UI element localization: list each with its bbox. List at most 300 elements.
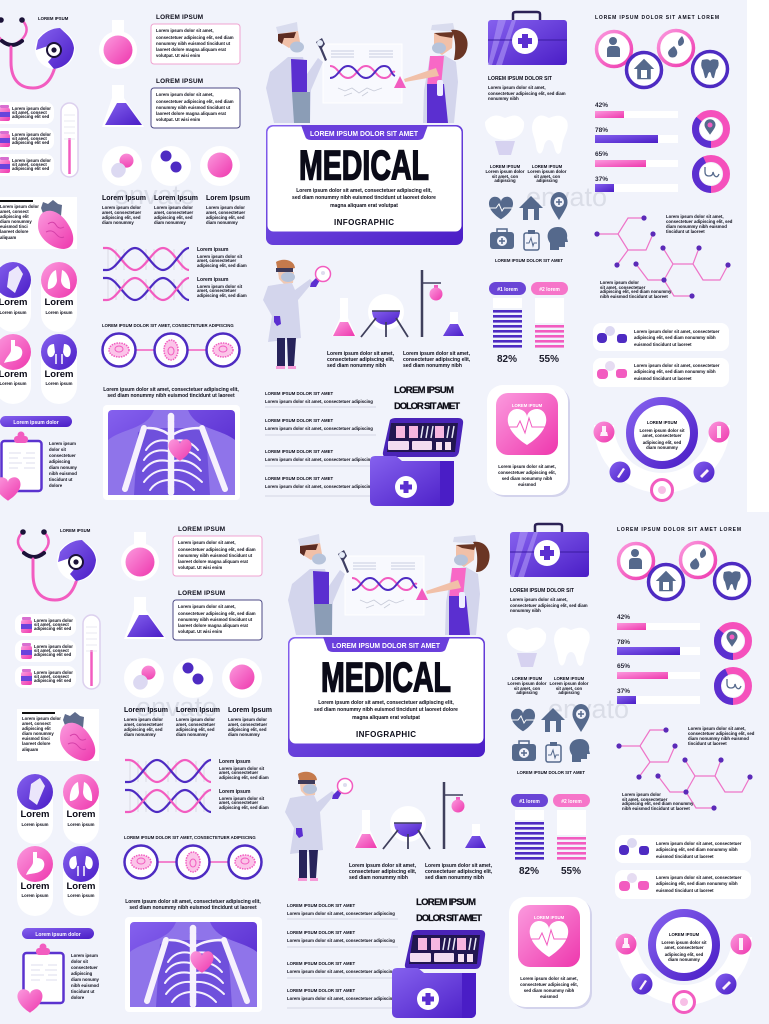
thermometer: [61, 103, 78, 177]
stacked level bars: 55%: [539, 354, 559, 365]
teeth: sit amet, con: [492, 174, 519, 179]
capsule notes: Lorem ipsum dolor sit amet, consectetuer: [634, 363, 720, 368]
vitamin list: Lorem ipsum dolor: [34, 670, 73, 675]
list with first aid kit: Lorem ipsum dolor sit amet, consectetuer adipiscing: [265, 457, 373, 462]
stethoscope and globe: [0, 16, 75, 88]
teeth: LOREM IPSUM: [490, 164, 521, 169]
molecule network: tincidunt ut laoreet: [666, 229, 705, 234]
clipboard note: nibh euismod: [71, 983, 99, 988]
pills trio: adipiscing elit, sed: [228, 727, 267, 732]
molecule network: adipiscing elit, sed diam nonummy: [622, 801, 694, 806]
dna strands: amet, consectetuer: [219, 800, 258, 805]
list with first aid kit: Lorem ipsum dolor sit amet, consectetuer adipiscing: [265, 426, 373, 431]
hub diagram: amet, consectetuer: [664, 945, 704, 950]
list with first aid kit: Lorem ipsum dolor sit amet, consectetuer adipiscing: [287, 969, 395, 974]
heart rate card: LOREM IPSUM: [512, 403, 543, 408]
vitamin list: Lorem ipsum dolor: [12, 106, 51, 111]
teeth: Lorem ipsum dolor: [528, 169, 567, 174]
organ pills: Lorem: [20, 881, 50, 892]
flask note pink: laoreet dolore magna aliquam erat: [178, 559, 249, 564]
vitamin list: sit amet, consect: [34, 674, 69, 679]
list with first aid kit: LOREM IPSUM: [416, 897, 476, 908]
heart rate card: consectetuer adipiscing elit,: [498, 470, 556, 475]
xray: sed diam nonummy nibh euismod tincidunt ut laoreet: [107, 393, 235, 399]
title card: MEDICAL: [321, 654, 451, 700]
title card: Lorem ipsum dolor sit amet, consectetuer adipiscing elit,: [296, 188, 432, 194]
top copy of the infographic: [0, 12, 733, 506]
molecule network: Lorem ipsum dolor sit amet,: [688, 726, 746, 731]
stethoscope and globe: [18, 528, 97, 600]
capsule notes: euismod tincidunt ut laoreet: [634, 376, 692, 381]
list with first aid kit: Lorem ipsum dolor sit amet, consectetuer adipiscing: [265, 484, 373, 489]
icon grid: [489, 192, 568, 263]
dna strands: adipiscing elit, sed diam: [219, 805, 269, 810]
vitamin list: adipiscing elit sed: [12, 114, 50, 119]
title card: LOREM IPSUM DOLOR SIT AMET: [332, 641, 440, 650]
watermark: [115, 186, 606, 206]
pills trio: Lorem ipsum dolor: [154, 205, 193, 210]
linked icon rings: [617, 527, 750, 600]
clipboard note: diam nonumy: [71, 977, 100, 982]
flask note purple: volutpat. Ut wisi enim: [178, 629, 222, 634]
dna strands: [125, 759, 269, 812]
icon grid: LOREM IPSUM DOLOR SIT AMET: [495, 258, 563, 263]
stacked level bars: [489, 282, 568, 365]
list with first aid kit: Lorem ipsum dolor sit amet, consectetuer adipiscing: [265, 399, 373, 404]
scientist and lab equipment: [285, 772, 493, 881]
hub diagram: adipiscing elit, sed: [665, 952, 704, 957]
heart panel: amet, consect: [22, 721, 51, 726]
pills trio: Lorem ipsum dolor: [124, 717, 163, 722]
capsule notes: Lorem ipsum dolor sit amet, consectetuer: [656, 841, 742, 846]
flask note purple: consectetuer adipiscing elit, sed diam: [156, 99, 234, 104]
scientist and lab equipment: sed diam nonummy nibh: [327, 363, 386, 369]
clipboard note: Lorem ipsum: [71, 953, 98, 958]
vitamin list: adipiscing elit sed: [12, 140, 50, 145]
stacked level bars: #2 lorem: [561, 799, 582, 805]
clipboard note: dolor sit: [49, 447, 67, 452]
scientist and lab equipment: consectetuer adipiscing elit,: [403, 357, 471, 363]
heart rate card: euismod: [540, 994, 558, 999]
stacked level bars: 55%: [561, 866, 581, 877]
capsule notes: Lorem ipsum dolor sit amet, consectetuer: [634, 329, 720, 334]
progress bars: 42%: [595, 102, 608, 109]
hub diagram: [594, 401, 730, 500]
heart panel: adipiscing elit: [22, 726, 51, 731]
vitamin list: adipiscing elit sed: [34, 678, 72, 683]
vitamin list: Lorem ipsum dolor: [12, 132, 51, 137]
xray: [103, 387, 240, 500]
dna strands: amet, consectetuer: [219, 770, 258, 775]
pills trio: Lorem Ipsum: [228, 707, 272, 714]
teeth: sit amet, con: [534, 174, 561, 179]
heart panel: amet, consect: [0, 209, 29, 214]
pills trio: adipiscing elit, sed: [124, 727, 163, 732]
teeth: LOREM IPSUM: [532, 164, 563, 169]
xray: sed diam nonummy nibh euismod tincidunt ut laoreet: [129, 905, 257, 911]
flask note pink: volutpat. Ut wisi enim: [178, 565, 222, 570]
clipboard note: dolore: [49, 483, 63, 488]
pills trio: diam nonummy: [154, 220, 186, 225]
hub diagram: Lorem ipsum dolor sit: [639, 428, 685, 433]
title card: LOREM IPSUM DOLOR SIT AMET: [310, 129, 418, 138]
watermark: [136, 692, 629, 724]
stethoscope and globe: LOREM IPSUM: [38, 16, 69, 21]
bacteria row: LOREM IPSUM DOLOR SIT AMET, CONSECTETUER ADIPISCING: [124, 835, 256, 840]
pills trio: Lorem ipsum dolor: [206, 205, 245, 210]
bottom copy of the infographic: [15, 524, 755, 1018]
title card: INFOGRAPHIC: [356, 730, 416, 739]
pills trio: Lorem Ipsum: [154, 195, 198, 202]
pills trio: Lorem Ipsum: [102, 195, 146, 202]
dna strands: adipiscing elit, sed diam: [197, 263, 247, 268]
heart rate card: [509, 897, 592, 1009]
title card: sed diam nonummy nibh euismod tincidunt ut laoreet dolore: [292, 195, 436, 201]
medical case: LOREM IPSUM DOLOR SIT: [488, 76, 552, 82]
list with first aid kit: LOREM IPSUM DOLOR SIT AMET: [265, 449, 333, 454]
watermark: envato: [548, 694, 629, 724]
pills trio: Lorem Ipsum: [176, 707, 220, 714]
scientist and lab equipment: [263, 260, 471, 369]
capsule notes: adipiscing elit, sed diam nonummy nibh: [634, 369, 716, 374]
medical case: nonummy nibh: [510, 608, 541, 613]
vitamin list: adipiscing elit sed: [34, 626, 72, 631]
hub diagram: LOREM IPSUM: [669, 932, 700, 937]
thermometer: [83, 615, 100, 689]
molecule network: diam nonummy nibh euismod: [688, 736, 749, 741]
stethoscope and globe: LOREM IPSUM: [60, 528, 91, 533]
vitamin list: Lorem ipsum dolor: [34, 618, 73, 623]
list with first aid kit: Lorem ipsum dolor sit amet, consectetuer adipiscing: [287, 911, 395, 916]
heart panel: aliquam: [22, 747, 38, 752]
flask note purple: nonummy nibh euismod tincidunt ut: [178, 617, 253, 622]
watermark: envato: [114, 180, 195, 210]
progress bars: 78%: [595, 127, 608, 134]
molecule network: Lorem ipsum dolor: [622, 792, 661, 797]
hub diagram: diam nonummy: [646, 445, 678, 450]
title card: MEDICAL: [299, 142, 429, 188]
xray: Lorem ipsum dolor sit amet, consectetuer adipiscing elit,: [125, 899, 261, 905]
molecule network: adipiscing elit, sed diam nonummy: [600, 289, 672, 294]
flask note pink: LOREM IPSUM: [178, 526, 225, 533]
pills trio: diam nonummy: [124, 732, 156, 737]
scientist and lab equipment: consectetuer adipiscing elit,: [327, 357, 395, 363]
heart panel: Lorem ipsum dolor: [0, 204, 39, 209]
pills trio: Lorem ipsum dolor: [228, 717, 267, 722]
xray: Lorem ipsum dolor sit amet, consectetuer adipiscing elit,: [103, 387, 239, 393]
xray: [125, 899, 262, 1012]
list with first aid kit: Lorem ipsum dolor sit amet, consectetuer adipiscing: [287, 938, 395, 943]
flask note purple: consectetuer adipiscing elit, sed diam: [178, 611, 256, 616]
pills trio: amet, consectetuer: [102, 210, 141, 215]
flask note pink: laoreet dolore magna aliquam erat: [156, 47, 227, 52]
capsule notes: Lorem ipsum dolor sit amet, consectetuer: [656, 875, 742, 880]
capsule notes: adipiscing elit, sed diam nonummy nibh: [634, 335, 716, 340]
heart panel: Lorem ipsum dolor: [22, 716, 61, 721]
pills trio: amet, consectetuer: [206, 210, 245, 215]
bacteria row: LOREM IPSUM DOLOR SIT AMET, CONSECTETUER ADIPISCING: [102, 323, 234, 328]
molecule network: nibh euismod tincidunt ut laoreet: [600, 294, 668, 299]
heart panel: aliquam: [0, 235, 16, 240]
teeth: adipiscing: [494, 178, 516, 183]
organ pills: Lorem ipsum: [22, 893, 49, 898]
bacteria row: [102, 323, 240, 366]
heart panel: laoreet dolore: [22, 741, 51, 746]
heart rate card: sed diam nonummy nibh: [524, 988, 575, 993]
stacked level bars: #1 lorem: [497, 287, 518, 293]
flask note pink: nonummy nibh euismod tincidunt ut: [178, 553, 253, 558]
list with first aid kit: LOREM IPSUM DOLOR SIT AMET: [265, 418, 333, 423]
organ pills: Lorem ipsum: [0, 381, 27, 386]
flask note purple: Lorem ipsum dolor sit amet,: [156, 92, 214, 97]
heart rate card: Lorem ipsum dolor sit amet,: [498, 464, 556, 469]
title card: Lorem ipsum dolor sit amet, consectetuer adipiscing elit,: [318, 700, 454, 706]
medical case: nonummy nibh: [488, 96, 519, 101]
organ pills: Lorem ipsum: [68, 822, 95, 827]
medical case: consectetuer adipiscing elit, sed diam: [488, 91, 566, 96]
pills trio: diam nonummy: [176, 732, 208, 737]
organ pills: Lorem ipsum: [68, 893, 95, 898]
stacked level bars: 82%: [497, 354, 517, 365]
scientist and lab equipment: sed diam nonummy nibh: [403, 363, 462, 369]
heart panel: [0, 197, 77, 249]
teeth: Lorem ipsum dolor: [486, 169, 525, 174]
list with first aid kit: [287, 897, 485, 1018]
clipboard note: tincidunt ut: [71, 989, 95, 994]
hub diagram: diam nonummy: [668, 957, 700, 962]
title card: magna aliquam erat volutpat: [330, 203, 398, 209]
watermark: envato: [136, 692, 217, 722]
flask note purple: [124, 590, 262, 640]
organ pills: Lorem: [44, 297, 74, 308]
donut charts: [718, 626, 748, 702]
flask note pink: [121, 526, 262, 581]
clipboard note: Lorem ipsum dolor: [13, 420, 59, 426]
molecule network: [594, 214, 733, 299]
pills trio: Lorem Ipsum: [124, 707, 168, 714]
stacked level bars: 82%: [519, 866, 539, 877]
heart panel: adipiscing elit: [0, 214, 29, 219]
organ pills: [0, 262, 77, 404]
dna strands: adipiscing elit, sed diam: [219, 775, 269, 780]
capsule notes: adipiscing elit, sed diam nonummy nibh: [656, 881, 738, 886]
progress bars: 37%: [617, 688, 630, 695]
dna strands: Lorem ipsum dolor sit: [197, 284, 243, 289]
vitamin list: sit amet, consect: [34, 648, 69, 653]
flask note pink: Lorem ipsum dolor sit amet,: [156, 28, 214, 33]
molecule network: sit amet, consectetuer: [622, 797, 668, 802]
scientist and lab equipment: sed diam nonummy nibh: [349, 875, 408, 881]
flask note pink: Lorem ipsum dolor sit amet,: [178, 540, 236, 545]
clipboard note: tincidunt ut: [49, 477, 73, 482]
vitamin list: [0, 102, 54, 176]
teeth: [485, 116, 568, 183]
vitamin list: adipiscing elit sed: [34, 652, 72, 657]
hub diagram: Lorem ipsum dolor sit: [661, 940, 707, 945]
flask note pink: consectetuer adipiscing elit, sed diam: [156, 35, 234, 40]
capsule notes: euismod tincidunt ut laoreet: [656, 854, 714, 859]
heart rate card: sed diam nonummy nibh: [502, 476, 553, 481]
heart panel: diam nonummy: [22, 731, 54, 736]
heart panel: euismod tinci: [0, 224, 28, 229]
flask note purple: volutpat. Ut wisi enim: [156, 117, 200, 122]
dna strands: Lorem ipsum: [219, 789, 251, 795]
progress bars: [595, 102, 678, 192]
flask note pink: LOREM IPSUM: [156, 14, 203, 21]
flask note purple: nonummy nibh euismod tincidunt ut: [156, 105, 231, 110]
organ pills: [17, 774, 99, 916]
scientist and lab equipment: Lorem ipsum dolor sit amet,: [403, 351, 471, 357]
list with first aid kit: DOLOR SIT AMET: [416, 913, 482, 924]
scientist and lab equipment: consectetuer adipiscing elit,: [425, 869, 493, 875]
molecule network: consectetuer adipiscing elit, sed: [688, 731, 755, 736]
teeth: Lorem ipsum dolor: [508, 681, 547, 686]
bottom copy background: [0, 512, 769, 1024]
pills trio: adipiscing elit, sed: [206, 215, 245, 220]
title card: magna aliquam erat volutpat: [352, 715, 420, 721]
pills trio: adipiscing elit, sed: [102, 215, 141, 220]
list with first aid kit: LOREM IPSUM DOLOR SIT AMET: [287, 930, 355, 935]
hub diagram: LOREM IPSUM: [647, 420, 678, 425]
clipboard note: [0, 416, 78, 501]
molecule network: tincidunt ut laoreet: [688, 741, 727, 746]
list with first aid kit: Lorem ipsum dolor sit amet, consectetuer adipiscing: [287, 996, 395, 1001]
scientist and lab equipment: sed diam nonummy nibh: [425, 875, 484, 881]
list with first aid kit: [265, 385, 463, 506]
dna strands: amet, consectetuer: [197, 288, 236, 293]
molecule network: [616, 726, 755, 811]
clipboard note: Lorem ipsum dolor: [35, 932, 81, 938]
pills trio: amet, consectetuer: [154, 210, 193, 215]
organ pills: Lorem ipsum: [0, 310, 27, 315]
flask note purple: laoreet dolore magna aliquam erat: [156, 111, 227, 116]
list with first aid kit: LOREM IPSUM DOLOR SIT AMET: [287, 961, 355, 966]
molecule network: Lorem ipsum dolor: [600, 280, 639, 285]
vitamin list: adipiscing elit sed: [12, 166, 50, 171]
watermark: envato: [526, 182, 607, 212]
stacked level bars: [511, 794, 590, 877]
vitamin list: Lorem ipsum dolor: [34, 644, 73, 649]
clipboard note: dolore: [71, 995, 85, 1000]
title card: [266, 125, 463, 245]
clipboard note: adipiscing: [71, 971, 93, 976]
heart rate card: euismod: [518, 482, 536, 487]
pills trio: [124, 658, 272, 737]
progress bars: 65%: [617, 663, 630, 670]
chart panel and doctors: [288, 534, 490, 635]
dna strands: adipiscing elit, sed diam: [197, 293, 247, 298]
organ pills: Lorem ipsum: [46, 381, 73, 386]
pills trio: Lorem ipsum dolor: [102, 205, 141, 210]
list with first aid kit: LOREM IPSUM DOLOR SIT AMET: [265, 391, 333, 396]
dna strands: Lorem ipsum: [219, 759, 251, 765]
flask note pink: [99, 14, 240, 69]
flask note pink: consectetuer adipiscing elit, sed diam: [178, 547, 256, 552]
dna strands: Lorem ipsum: [197, 277, 229, 283]
dna strands: Lorem ipsum: [197, 247, 229, 253]
progress bars: 37%: [595, 176, 608, 183]
list with first aid kit: LOREM IPSUM: [394, 385, 454, 396]
list with first aid kit: LOREM IPSUM DOLOR SIT AMET: [287, 988, 355, 993]
progress bars: [617, 614, 700, 704]
dna strands: Lorem ipsum dolor sit: [219, 766, 265, 771]
linked icon rings: LOREM IPSUM DOLOR SIT AMET LOREM: [595, 15, 719, 21]
dna strands: Lorem ipsum dolor sit: [197, 254, 243, 259]
hub diagram: amet, consectetuer: [642, 433, 682, 438]
vitamin list: [15, 614, 76, 688]
flask note purple: LOREM IPSUM: [156, 78, 203, 85]
medical case: [488, 12, 567, 101]
dna strands: Lorem ipsum dolor sit: [219, 796, 265, 801]
title card: sed diam nonummy nibh euismod tincidunt ut laoreet dolore: [314, 707, 458, 713]
organ pills: Lorem ipsum: [22, 822, 49, 827]
teeth: [507, 628, 590, 695]
heart panel: [17, 709, 99, 761]
vitamin list: Lorem ipsum dolor: [12, 158, 51, 163]
heart rate card: consectetuer adipiscing elit,: [520, 982, 578, 987]
organ pills: Lorem: [20, 809, 50, 820]
clipboard note: nibh euismod: [49, 471, 77, 476]
linked icon rings: [595, 15, 728, 88]
pills trio: amet, consectetuer: [176, 722, 215, 727]
molecule network: sit amet, consectetuer: [600, 285, 646, 290]
list with first aid kit: LOREM IPSUM DOLOR SIT AMET: [265, 476, 333, 481]
teeth: LOREM IPSUM: [554, 676, 585, 681]
vitamin list: sit amet, consect: [12, 162, 47, 167]
flask note pink: volutpat. Ut wisi enim: [156, 53, 200, 58]
molecule network: consectetuer adipiscing elit, sed: [666, 219, 733, 224]
scientist and lab equipment: consectetuer adipiscing elit,: [349, 869, 417, 875]
teeth: adipiscing: [536, 178, 558, 183]
title card: [288, 637, 485, 757]
pills trio: [102, 146, 250, 225]
capsule notes: [593, 323, 729, 387]
pills trio: diam nonummy: [206, 220, 238, 225]
medical case: [510, 524, 589, 613]
medical case: Lorem ipsum dolor sit amet,: [510, 597, 568, 602]
teeth: LOREM IPSUM: [512, 676, 543, 681]
flask note purple: laoreet dolore magna aliquam erat: [178, 623, 249, 628]
organ pills: Lorem ipsum: [46, 310, 73, 315]
icon grid: LOREM IPSUM DOLOR SIT AMET: [517, 770, 585, 775]
pills trio: diam nonummy: [228, 732, 260, 737]
capsule notes: [615, 835, 751, 899]
medical case: consectetuer adipiscing elit, sed diam: [510, 603, 588, 608]
bacteria row: [124, 835, 262, 878]
chart panel and doctors: [266, 22, 468, 123]
teeth: adipiscing: [558, 690, 580, 695]
stacked level bars: #1 lorem: [519, 799, 540, 805]
capsule notes: adipiscing elit, sed diam nonummy nibh: [656, 847, 738, 852]
pills trio: Lorem Ipsum: [206, 195, 250, 202]
heart rate card: LOREM IPSUM: [534, 915, 565, 920]
medical case: LOREM IPSUM DOLOR SIT: [510, 588, 574, 594]
list with first aid kit: LOREM IPSUM DOLOR SIT AMET: [287, 903, 355, 908]
progress bars: 78%: [617, 639, 630, 646]
organ pills: Lorem: [44, 369, 74, 380]
organ pills: Lorem: [66, 809, 96, 820]
pills trio: Lorem ipsum dolor: [176, 717, 215, 722]
molecule network: Lorem ipsum dolor sit amet,: [666, 214, 724, 219]
flask note purple: [102, 78, 240, 128]
molecule network: diam nonummy nibh euismod: [666, 224, 727, 229]
donut charts: [696, 114, 726, 190]
heart rate card: [487, 385, 570, 497]
teeth: Lorem ipsum dolor: [550, 681, 589, 686]
flask note purple: Lorem ipsum dolor sit amet,: [178, 604, 236, 609]
scientist and lab equipment: Lorem ipsum dolor sit amet,: [349, 863, 417, 869]
teeth: adipiscing: [516, 690, 538, 695]
